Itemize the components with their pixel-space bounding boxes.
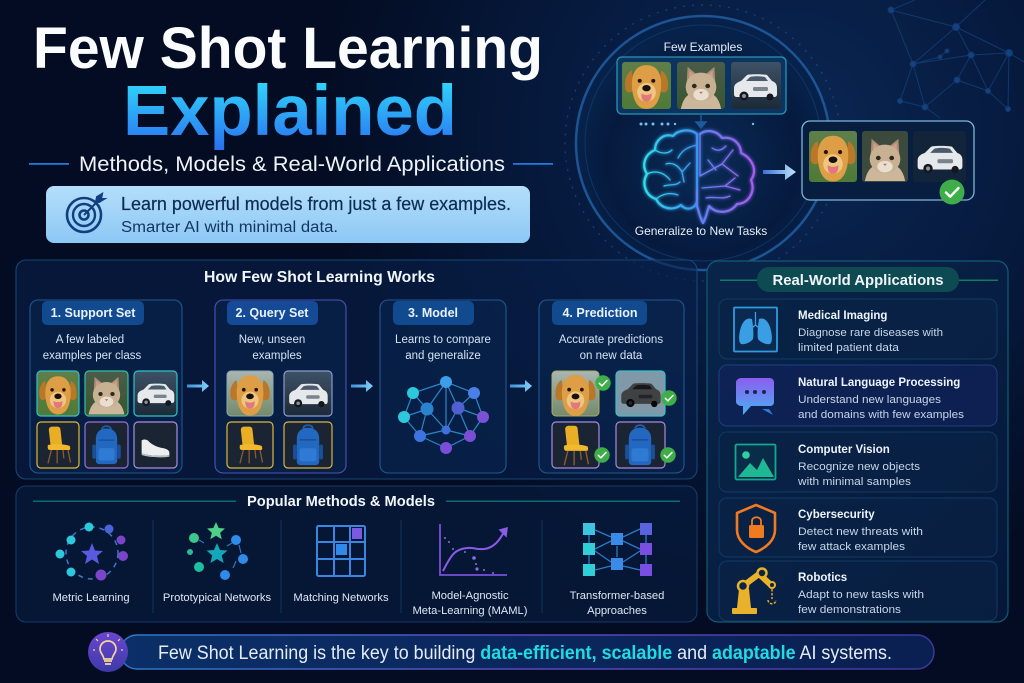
method: matching networks: [293, 526, 389, 604]
heading pill: Real-World Applications: [772, 272, 944, 289]
takeaway text: Few Shot Learning is the key to building data-efficient, scalable and adaptable AI systems.: [158, 643, 892, 664]
method: matching networks: Matching Networks: [293, 592, 389, 604]
icon: light bulb: [88, 632, 128, 672]
step 1 support set: A few labeled: [56, 334, 124, 346]
application: cybersecurity: few attack examples: [798, 541, 905, 553]
method: transformer: Approaches: [587, 605, 647, 617]
application: NLP: [719, 365, 997, 426]
step 1 support set: 1. Support Set: [51, 306, 136, 320]
arrow 2: [351, 380, 373, 392]
method: metric learning: Metric Learning: [52, 592, 130, 604]
panel: real-world applications: [707, 261, 1008, 622]
application: robotics: [719, 561, 997, 621]
icon: brain: [644, 130, 754, 223]
application: cybersecurity: Cybersecurity: [798, 509, 875, 521]
step 3 model: 3. Model: [408, 306, 458, 320]
step 4 prediction: 4. Prediction: [562, 306, 638, 320]
icon: check: [940, 180, 964, 204]
method: MAML: Meta-Learning (MAML): [412, 605, 528, 617]
few examples label: Few Examples: [664, 40, 742, 54]
step 4 prediction: Accurate predictions: [559, 334, 663, 346]
callout banner: Learn powerful models from just a few examples.: [121, 194, 511, 214]
network decoration top right: [888, 0, 1024, 118]
application: medical imaging: [719, 299, 997, 359]
arrow into brain: [696, 114, 706, 128]
method: MAML: Model-Agnostic: [431, 590, 509, 602]
progress dots: [640, 122, 754, 126]
caption: Generalize to New Tasks: [635, 224, 767, 238]
method: MAML: [412, 524, 528, 617]
arrow 1: [187, 380, 209, 392]
icon: chat bubble: [736, 378, 774, 415]
application: computer vision: [719, 432, 997, 492]
icons: checks: [594, 375, 677, 463]
method: prototypical networks: [163, 522, 271, 604]
step 3 model: Learns to compare: [395, 334, 491, 346]
step 2 query set: examples: [252, 350, 302, 362]
application: NLP: Natural Language Processing: [798, 377, 960, 389]
application: NLP: and domains with few examples: [798, 409, 964, 421]
step 4 prediction: on new data: [580, 350, 643, 362]
step 4 prediction: [539, 300, 684, 473]
title accent word: Explained: [123, 72, 457, 151]
icon: lungs: [734, 308, 777, 352]
step 3 model: [380, 300, 506, 473]
arrow to result: [763, 164, 796, 180]
application: computer vision: with minimal samples: [797, 476, 911, 488]
method: transformer: Transformer-based: [570, 590, 664, 602]
icon: shield: [737, 505, 775, 552]
method: metric learning: [52, 522, 130, 604]
step 1 support set: examples per class: [43, 350, 141, 362]
application: robotics: Adapt to new tasks with: [798, 589, 924, 601]
panel: popular methods: [16, 486, 697, 622]
step 2 query set: New, unseen: [239, 334, 305, 346]
method: transformer: [570, 523, 664, 617]
heading pill: [757, 267, 959, 292]
callout banner: [46, 186, 530, 243]
step 2 query set: 2. Query Set: [236, 306, 309, 320]
heading: How Few Shot Learning Works: [204, 269, 435, 286]
hero illustration: [565, 5, 841, 281]
heading: Popular Methods & Models: [247, 494, 435, 510]
callout banner: Smarter AI with minimal data.: [121, 219, 338, 236]
icon: neural network: [398, 376, 489, 454]
application: medical imaging: Diagnose rare diseases with: [798, 327, 943, 339]
icon: robot arm: [732, 568, 776, 614]
application: robotics: few demonstrations: [798, 604, 901, 616]
takeaway bar: [88, 632, 934, 672]
application: NLP: Understand new languages: [798, 394, 941, 406]
icon: image: [736, 444, 776, 480]
application: cybersecurity: [719, 498, 997, 557]
icon: target: [67, 194, 104, 232]
few examples strip: [617, 57, 786, 114]
application: computer vision: Computer Vision: [798, 444, 890, 456]
arrow 3: [510, 380, 532, 392]
step 3 model: and generalize: [405, 350, 481, 362]
title: Few Shot Learning: [33, 16, 543, 81]
step 1 support set: [30, 300, 182, 473]
result frame: [802, 121, 974, 204]
application: medical imaging: Medical Imaging: [798, 310, 887, 322]
application: medical imaging: limited patient data: [798, 342, 900, 354]
step 2 query set: [215, 300, 346, 473]
method: prototypical networks: Prototypical Networks: [163, 592, 271, 604]
subtitle: Methods, Models & Real-World Applications: [79, 153, 505, 176]
application: cybersecurity: Detect new threats with: [798, 526, 923, 538]
application: robotics: Robotics: [798, 572, 847, 584]
panel: how it works: [16, 260, 697, 479]
application: computer vision: Recognize new objects: [798, 461, 920, 473]
